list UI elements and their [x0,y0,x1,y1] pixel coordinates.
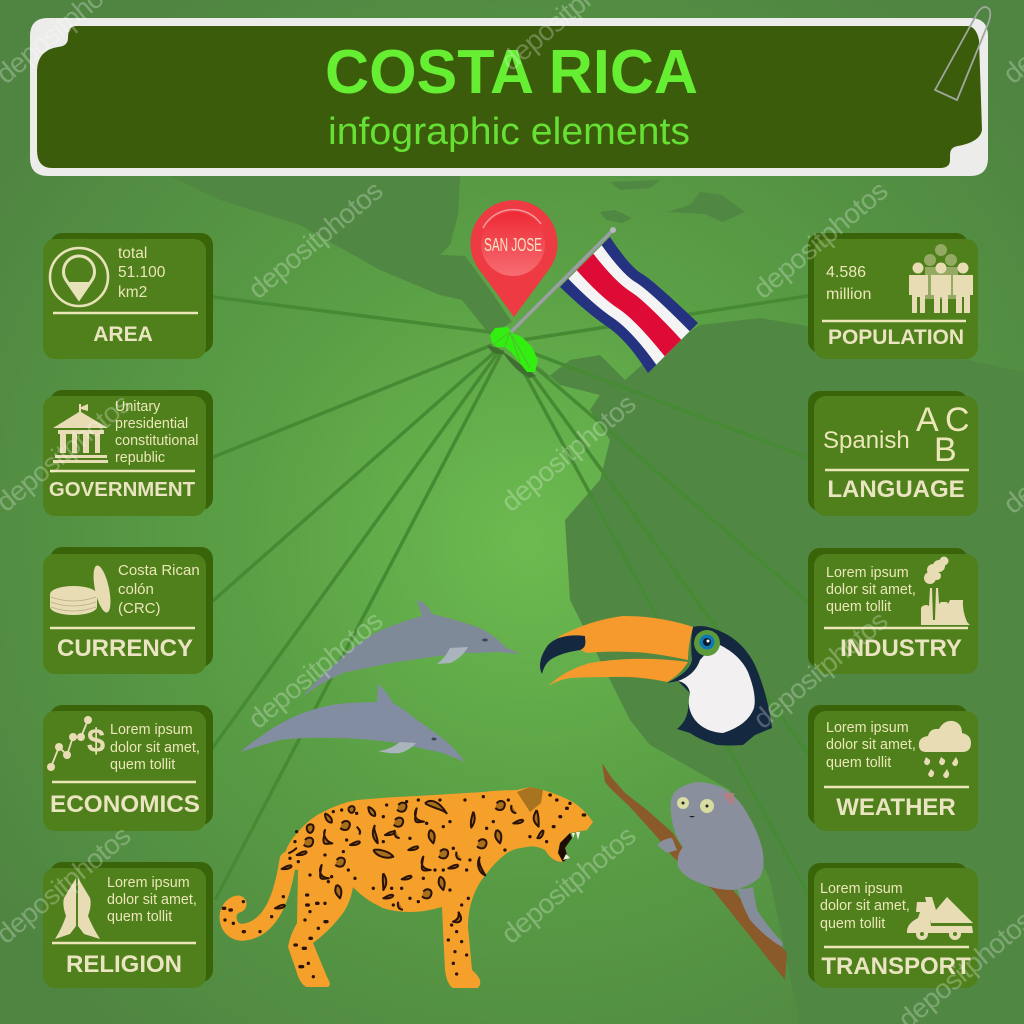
panel: transport [808,863,978,988]
panel: transport: Lorem ipsum [820,881,903,897]
connector lines [206,295,814,905]
watermarks: depositphotos [495,388,641,518]
panel: religion: Lorem ipsum [107,875,190,891]
panel: language: Spanish [823,427,910,454]
map pin: San Jose [470,200,558,317]
icon: dump truck [907,897,973,940]
icon: location pin [50,248,108,306]
panel: transport: dolor sit amet, [820,898,910,914]
subtitle text: infographic elements [328,111,690,153]
panel: language: LANGUAGE [827,476,965,503]
panel: weather: Lorem ipsum [826,720,909,736]
panel: economics: Lorem ipsum [110,722,193,738]
title text: COSTA RICA [325,38,698,107]
panel: economics: quem tollit [110,757,175,773]
panel: economics [43,705,213,831]
panel: religion: quem tollit [107,909,172,925]
icon: letters: A [916,401,939,439]
Costa Rica shape [487,327,538,378]
panel: religion: dolor sit amet, [107,892,197,908]
dolphin: lower [241,684,465,762]
panel: industry: quem tollit [826,599,891,615]
jaguar [223,787,593,988]
watermarks: depositphotos [747,175,893,305]
watermarks: depositphotos [242,175,388,305]
icon: praying hands [55,878,100,939]
panel: religion [43,862,213,988]
icon: coins [50,564,114,615]
watermarks: depositphotos [242,605,388,735]
panel: industry [808,548,978,674]
panel: area: total [118,245,147,262]
panel: population: POPULATION [828,326,964,349]
panel: government: republic [115,450,165,466]
panel: industry: INDUSTRY [840,635,962,662]
watermarks: depositphotos [495,820,641,950]
panel: currency: colón [118,581,154,598]
panel: economics: ECONOMICS [50,791,200,818]
panel: population: million [826,286,871,303]
panel: economics: dolor sit amet, [110,740,200,756]
panel: transport: quem tollit [820,916,885,932]
loris [657,782,783,947]
icon: government building [53,404,108,463]
panel: area: 51.100 [118,264,166,281]
paper clip [935,7,990,100]
toucan [540,616,772,746]
panel: weather: quem tollit [826,755,891,771]
panel: weather: WEATHER [836,794,956,821]
panel: religion: RELIGION [66,951,182,978]
icon: letters [916,401,970,469]
panel: currency: CURRENCY [57,635,193,662]
panel: area: km2 [118,284,147,301]
flag of Costa Rica [511,227,698,373]
icon: letters: B [934,431,957,469]
watermarks: depositphotos [747,605,893,735]
panel: area [43,233,213,359]
panel: currency: Costa Rican [118,562,200,579]
panel: weather [808,705,978,831]
panel: government: Unitary [115,399,161,415]
icon: letters: C [945,401,970,439]
branch [602,763,787,980]
icon: people group [909,244,973,313]
panel: industry: dolor sit amet, [826,582,916,598]
panel: currency: (CRC) [118,600,160,617]
icon: growth chart [47,716,105,771]
icon: growth chart: $ [87,722,105,759]
dolphin: upper [302,600,521,697]
panel: industry: Lorem ipsum [826,565,909,581]
panel: area: AREA [93,323,153,346]
panel: currency [43,547,213,674]
panel: government: constitutional [115,433,198,449]
panel: population: 4.586 [826,264,866,281]
panel: weather: dolor sit amet, [826,737,916,753]
panel: government: presidential [115,416,188,432]
panel: transport: TRANSPORT [821,953,971,980]
icon: rain cloud [919,721,971,778]
panel: government: GOVERNMENT [49,479,196,501]
icon: factory [921,556,970,625]
map pin: San Jose: SAN JOSE [484,235,542,255]
title banner [30,7,990,176]
panel: government [43,390,213,516]
panel: language [808,391,978,516]
panel: population [808,233,978,359]
